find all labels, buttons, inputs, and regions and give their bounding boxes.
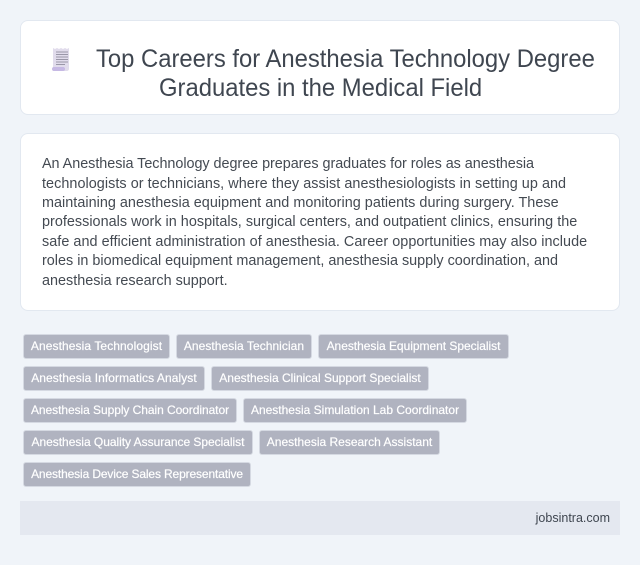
header panel bbox=[20, 20, 620, 115]
career tags: Anesthesia Research Assistant bbox=[267, 435, 432, 449]
icon: document scroll bbox=[52, 48, 69, 71]
footer source text: jobsintra.com bbox=[536, 511, 610, 525]
title bbox=[96, 45, 595, 102]
description text: roles in biomedical equipment management, anesthesia supply coordination, and bbox=[42, 253, 558, 269]
career tags: Anesthesia Device Sales Representative bbox=[31, 467, 243, 481]
career tags: Anesthesia Informatics Analyst bbox=[31, 371, 197, 385]
description text: safe and efficient administration of anesthesia. Career opportunities may also include bbox=[42, 234, 587, 250]
description panel bbox=[20, 133, 620, 311]
career tags: Anesthesia Technologist bbox=[31, 339, 162, 353]
description text bbox=[42, 156, 587, 289]
title: Top Careers for Anesthesia Technology Degree bbox=[96, 45, 595, 73]
description text: An Anesthesia Technology degree prepares graduates for roles as anesthesia bbox=[42, 156, 534, 172]
career tags bbox=[23, 334, 509, 487]
career tags: Anesthesia Supply Chain Coordinator bbox=[31, 403, 229, 417]
career tags: Anesthesia Equipment Specialist bbox=[327, 339, 500, 353]
description text: anesthesia research support. bbox=[42, 273, 228, 289]
title: Graduates in the Medical Field bbox=[159, 74, 482, 102]
description text: technologists or technicians, where they assist anesthesiologists in setting up and bbox=[42, 176, 566, 192]
career tags: Anesthesia Technician bbox=[184, 339, 304, 353]
description text: professionals work in hospitals, surgical centers, and outpatient clinics, ensuring the bbox=[42, 214, 577, 230]
career tags: Anesthesia Quality Assurance Specialist bbox=[32, 435, 244, 449]
description text: maintaining anesthesia equipment and monitoring patients during surgery. These bbox=[42, 195, 559, 211]
footer bar bbox=[20, 501, 620, 535]
career tags: Anesthesia Clinical Support Specialist bbox=[219, 371, 421, 385]
career tags: Anesthesia Simulation Lab Coordinator bbox=[251, 403, 459, 417]
